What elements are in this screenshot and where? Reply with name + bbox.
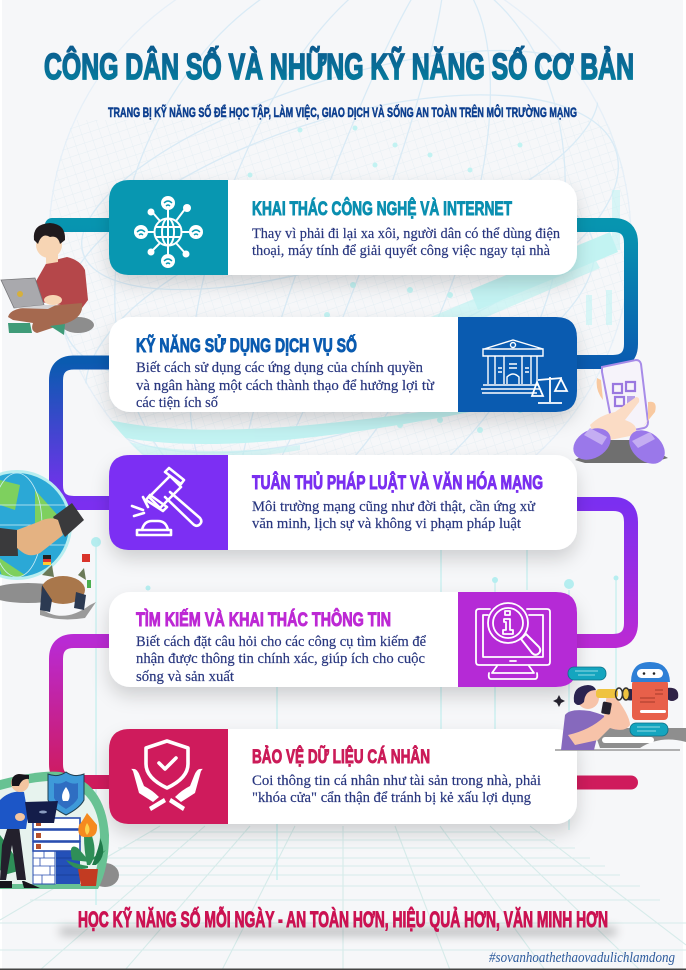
illustration: globe with handshake <box>0 470 96 619</box>
background floor grid <box>0 826 686 970</box>
connector 3 <box>570 504 631 641</box>
icon: shield in hands <box>132 741 202 811</box>
footer shadow <box>60 928 616 935</box>
body text 1: Thay vì phải đi lại xa xôi, người dân có thể dùng điện <box>252 226 561 242</box>
heading 1: KHAI THÁC CÔNG NGHỆ VÀ INTERNET <box>252 196 512 220</box>
panel: card 2 <box>109 317 577 412</box>
panel: card 5 <box>109 729 577 824</box>
icon: gavel <box>132 468 201 535</box>
body text 4: nhận được thông tin chính xác, giúp ích cho cuộc <box>136 651 425 667</box>
body text 3: văn minh, lịch sự và không vi phạm pháp luật <box>252 516 521 532</box>
illustration: man with laptop <box>1 223 94 335</box>
background globe <box>49 0 632 455</box>
heading 4: TÌM KIẾM VÀ KHAI THÁC THÔNG TIN <box>136 607 391 631</box>
connector 5 <box>570 776 631 790</box>
body text 5: Coi thông tin cá nhân như tài sản trong nhà, phải <box>252 773 541 789</box>
body text 4: Biết cách đặt câu hỏi cho các công cụ tìm kiếm để <box>136 634 427 650</box>
heading 5: BẢO VỆ DỮ LIỆU CÁ NHÂN <box>252 744 430 768</box>
connector 1 <box>52 225 631 362</box>
illustration: hand with QR phone <box>568 360 671 471</box>
heading 2: KỸ NĂNG SỬ DỤNG DỊCH VỤ SỐ <box>136 333 357 357</box>
illustration: person with binoculars and robot <box>553 662 686 750</box>
body text 1: thoại, máy tính để giải quyết công việc ngay tại nhà <box>252 243 551 259</box>
panel: card 3 <box>109 455 577 550</box>
body text 2: các tiện ích số <box>136 395 219 411</box>
icon: bank and scales <box>481 340 567 403</box>
icon: globe network <box>134 196 203 268</box>
heading 3: TUÂN THỦ PHÁP LUẬT VÀ VĂN HÓA MẠNG <box>252 470 543 494</box>
body text 2: Biết cách sử dụng các ứng dụng của chính quyền <box>136 360 424 376</box>
panel: card 1 <box>109 180 577 275</box>
body text 4: sống và sản xuất <box>136 669 234 685</box>
body text 5: "khóa cửa" cẩn thận để tránh bị kẻ xấu lợi dụng <box>252 790 531 806</box>
background tech lines <box>91 537 618 905</box>
brick and server stack <box>33 818 80 884</box>
panel: card 4 <box>109 592 577 687</box>
body text 2: và ngân hàng một cách thành thạo để hưởng lợi từ <box>136 378 435 394</box>
connector 2 <box>56 362 115 503</box>
connector 4 <box>56 641 115 782</box>
body text 3: Môi trường mạng cũng như đời thật, cần ứng xử <box>252 499 536 515</box>
icon: monitor with magnifier <box>476 603 550 679</box>
illustration: man with server, shield and plant <box>0 772 119 889</box>
